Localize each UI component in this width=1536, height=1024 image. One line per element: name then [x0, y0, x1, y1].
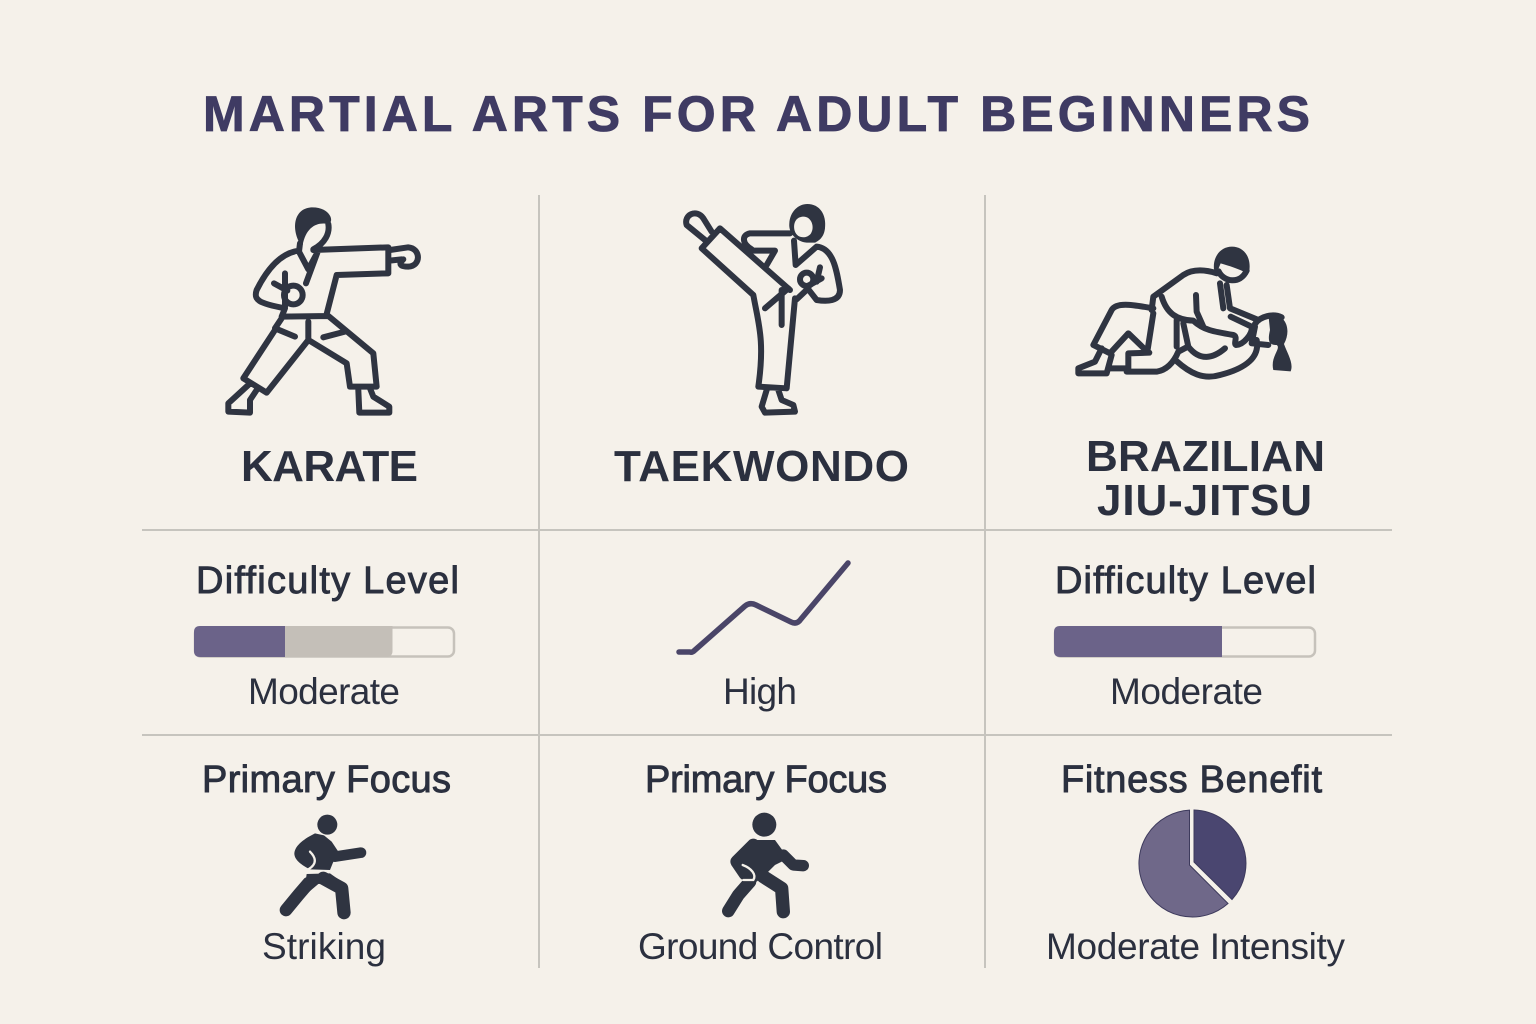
heading: difficulty level: Difficulty Level	[1055, 560, 1316, 602]
label: karate: KARATE	[241, 442, 418, 491]
value: moderate: Moderate	[1110, 671, 1263, 712]
panel: taekwondo difficulty	[679, 563, 848, 712]
label: brazilian jiu-jitsu	[1086, 432, 1325, 525]
label: brazilian jiu-jitsu: BRAZILIAN	[1086, 432, 1325, 481]
icon: taekwondo high kick figure	[686, 204, 840, 413]
heading: difficulty level: Difficulty Level	[196, 560, 459, 602]
panel: taekwondo focus	[638, 759, 887, 967]
icon: ground control figure	[728, 813, 803, 912]
heading: fitness benefit: Fitness Benefit	[1061, 759, 1322, 801]
panel: brazilian jiu-jitsu	[1078, 247, 1325, 525]
line chart: rising difficulty	[679, 563, 848, 652]
icon: karate punch figure	[228, 207, 418, 413]
value: moderate: Moderate	[248, 671, 400, 712]
panel: karate	[228, 207, 418, 491]
panel: karate focus	[202, 759, 451, 967]
value: high: High	[723, 671, 797, 712]
heading: primary focus: Primary Focus	[645, 759, 887, 801]
title: MARTIAL ARTS FOR ADULT BEGINNERS	[203, 86, 1310, 142]
panel: jiu-jitsu fitness	[1046, 759, 1346, 967]
panel: jiu-jitsu difficulty	[1054, 560, 1316, 712]
value: ground control: Ground Control	[638, 926, 883, 967]
value: moderate intensity: Moderate Intensity	[1046, 926, 1346, 967]
icon: grappling figures	[1078, 247, 1292, 377]
icon: striking figure	[286, 815, 361, 913]
pie chart: fitness benefit	[1139, 810, 1246, 917]
progress bar: karate difficulty	[194, 626, 454, 657]
panel: karate difficulty	[194, 560, 459, 712]
panel: taekwondo	[614, 204, 909, 491]
label: brazilian jiu-jitsu: JIU-JITSU	[1097, 476, 1312, 525]
value: striking: Striking	[262, 926, 386, 967]
progress bar: jiu-jitsu difficulty	[1054, 626, 1315, 657]
label: taekwondo: TAEKWONDO	[614, 442, 909, 491]
heading: primary focus: Primary Focus	[202, 759, 451, 801]
